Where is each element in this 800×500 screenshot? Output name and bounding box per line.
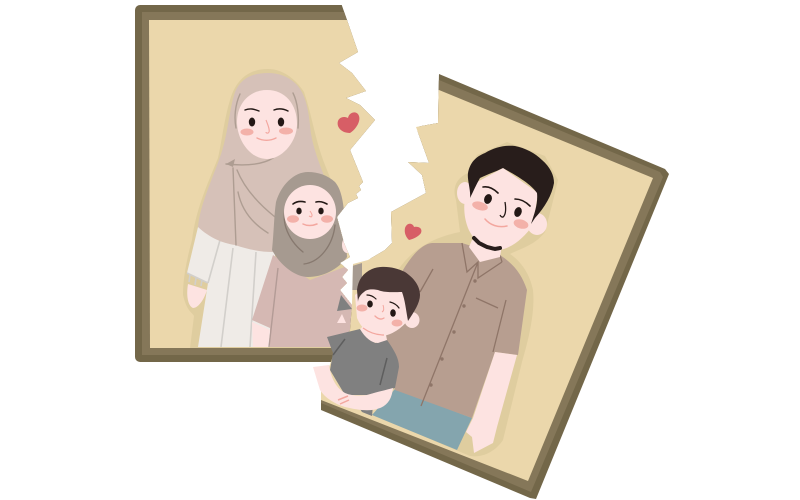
boy hair xyxy=(357,267,420,321)
boy shirt xyxy=(327,329,399,395)
mother dress xyxy=(187,227,275,347)
father halo xyxy=(385,142,558,456)
boy figure xyxy=(313,267,420,410)
daughter facial features xyxy=(287,201,333,226)
boy arm xyxy=(313,365,393,410)
daughter face xyxy=(284,185,336,239)
mother hijab xyxy=(198,73,330,252)
father shirt buttons xyxy=(429,279,477,387)
daughter dress xyxy=(252,255,358,347)
panel: right torn photo piece xyxy=(321,74,669,499)
mother figure xyxy=(183,69,358,348)
father shirt xyxy=(385,243,527,418)
father beard xyxy=(474,238,500,249)
father face xyxy=(464,168,538,250)
mother sleeve cuff and folds xyxy=(187,240,256,347)
father neck xyxy=(469,240,502,262)
daughter hand xyxy=(252,322,270,347)
boy face xyxy=(355,280,408,336)
panel: left torn photo piece xyxy=(135,5,395,362)
mother halo xyxy=(183,69,352,348)
boy shirt folds xyxy=(333,339,387,385)
boy fingers xyxy=(338,396,349,404)
father figure xyxy=(360,142,558,456)
daughter hijab folds xyxy=(284,205,335,264)
boy facial features xyxy=(356,295,402,335)
father arm xyxy=(466,352,517,453)
mother facial features xyxy=(240,109,293,140)
heart: right xyxy=(405,224,421,240)
mother face xyxy=(237,90,297,159)
mother hand xyxy=(187,284,207,308)
child hand sliver xyxy=(342,240,348,253)
pink hand sliver xyxy=(337,314,346,323)
father ears xyxy=(457,182,547,235)
left frame xyxy=(135,5,395,362)
heart: left xyxy=(338,112,359,133)
father hair xyxy=(468,146,554,224)
father facial features xyxy=(471,187,530,230)
boy neck xyxy=(360,320,387,343)
boy ear xyxy=(404,312,420,328)
right photo background xyxy=(321,90,653,481)
left photo background xyxy=(149,20,395,348)
hijab sliver beside boy xyxy=(352,263,362,290)
daughter dress fold xyxy=(269,268,278,347)
father shirt details xyxy=(420,243,506,406)
right frame xyxy=(321,74,669,499)
daughter hijab xyxy=(272,172,347,277)
father pants xyxy=(372,389,472,450)
grey hem under arm xyxy=(360,410,372,416)
illustration: torn family photo xyxy=(135,5,669,499)
mother hijab knot xyxy=(227,159,235,167)
mother hijab folds xyxy=(226,93,298,245)
grey shirt sliver xyxy=(337,295,352,311)
